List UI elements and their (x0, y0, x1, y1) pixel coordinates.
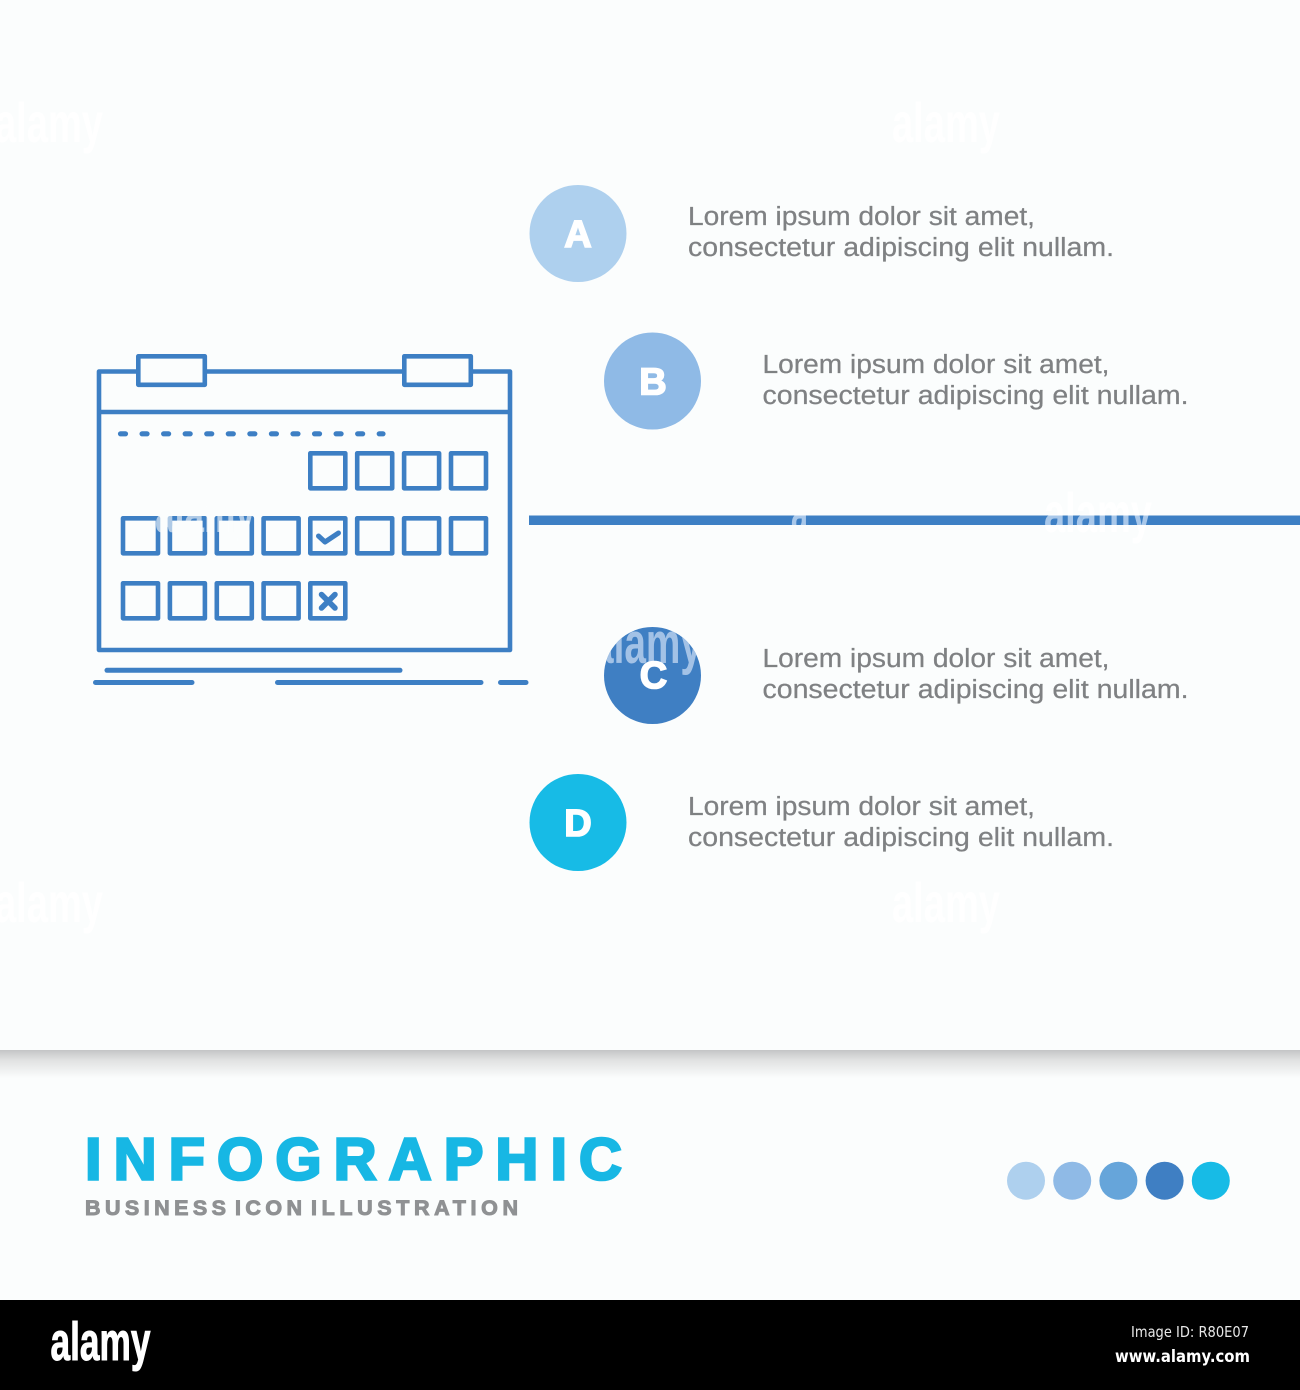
calendar second row of days (123, 518, 486, 553)
title: INFOGRAPHIC (85, 1126, 622, 1192)
website: www.alamy.com (1115, 1347, 1250, 1366)
letter B: B (639, 362, 667, 404)
step A (530, 185, 1114, 282)
text D: consectetur adipiscing elit nullam. (688, 824, 1114, 852)
circle B (604, 332, 701, 430)
calendar right tab (404, 356, 471, 385)
watermark over calendar squares: alamy (155, 481, 255, 544)
faint background watermarks (0, 91, 1152, 934)
text B: consectetur adipiscing elit nullam. (762, 382, 1188, 410)
icon: check mark (318, 533, 338, 542)
watermark in circle C: alamy (592, 611, 702, 676)
calendar left tab (138, 356, 205, 385)
watermark on bar: alamy (1044, 481, 1152, 544)
faint background watermarks: alamy (892, 91, 1000, 154)
letter A: A (564, 214, 592, 256)
text C: Lorem ipsum dolor sit amet, (762, 645, 1110, 673)
subtitle: BUSINESS (85, 1196, 226, 1220)
circle D (530, 774, 626, 871)
calendar first row of days (310, 453, 486, 488)
watermark on bar: a (791, 481, 808, 544)
step C (604, 627, 1186, 724)
footer black bar (0, 1300, 1300, 1390)
watermark on bar (792, 516, 1148, 525)
calendar header line (99, 410, 510, 414)
image id: Image ID: R80E07 (1131, 1323, 1249, 1341)
text B (762, 351, 1188, 410)
calendar body (99, 372, 510, 650)
horizontal connector bar (529, 516, 1300, 525)
text A: consectetur adipiscing elit nullam. (688, 234, 1114, 262)
ground lines (96, 670, 526, 682)
text C (762, 645, 1188, 704)
subtitle: ICON (235, 1196, 302, 1220)
subtitle (85, 1196, 518, 1220)
text A (688, 203, 1114, 262)
icon: calendar (96, 356, 526, 682)
calendar third row of days (123, 583, 345, 618)
circle C (604, 627, 701, 724)
text A: Lorem ipsum dolor sit amet, (688, 203, 1035, 231)
subtitle: ILLUSTRATION (311, 1196, 518, 1220)
icon: cross mark (322, 594, 335, 608)
footer shadow band (0, 1050, 1300, 1078)
text C: consectetur adipiscing elit nullam. (762, 676, 1188, 704)
step B (604, 332, 1188, 430)
text D (688, 793, 1114, 852)
circle A (530, 185, 626, 282)
faint background watermarks: alamy (892, 871, 1000, 934)
faint background watermarks: alamy (1044, 481, 1152, 544)
letter D: D (564, 803, 592, 845)
letter C: C (640, 655, 667, 697)
text D: Lorem ipsum dolor sit amet, (688, 793, 1035, 821)
alamy logo: alamy (50, 1312, 150, 1372)
step D (530, 774, 1114, 871)
progress dots (1007, 1162, 1230, 1200)
text B: Lorem ipsum dolor sit amet, (762, 351, 1110, 379)
calendar dashed title line (120, 431, 383, 436)
